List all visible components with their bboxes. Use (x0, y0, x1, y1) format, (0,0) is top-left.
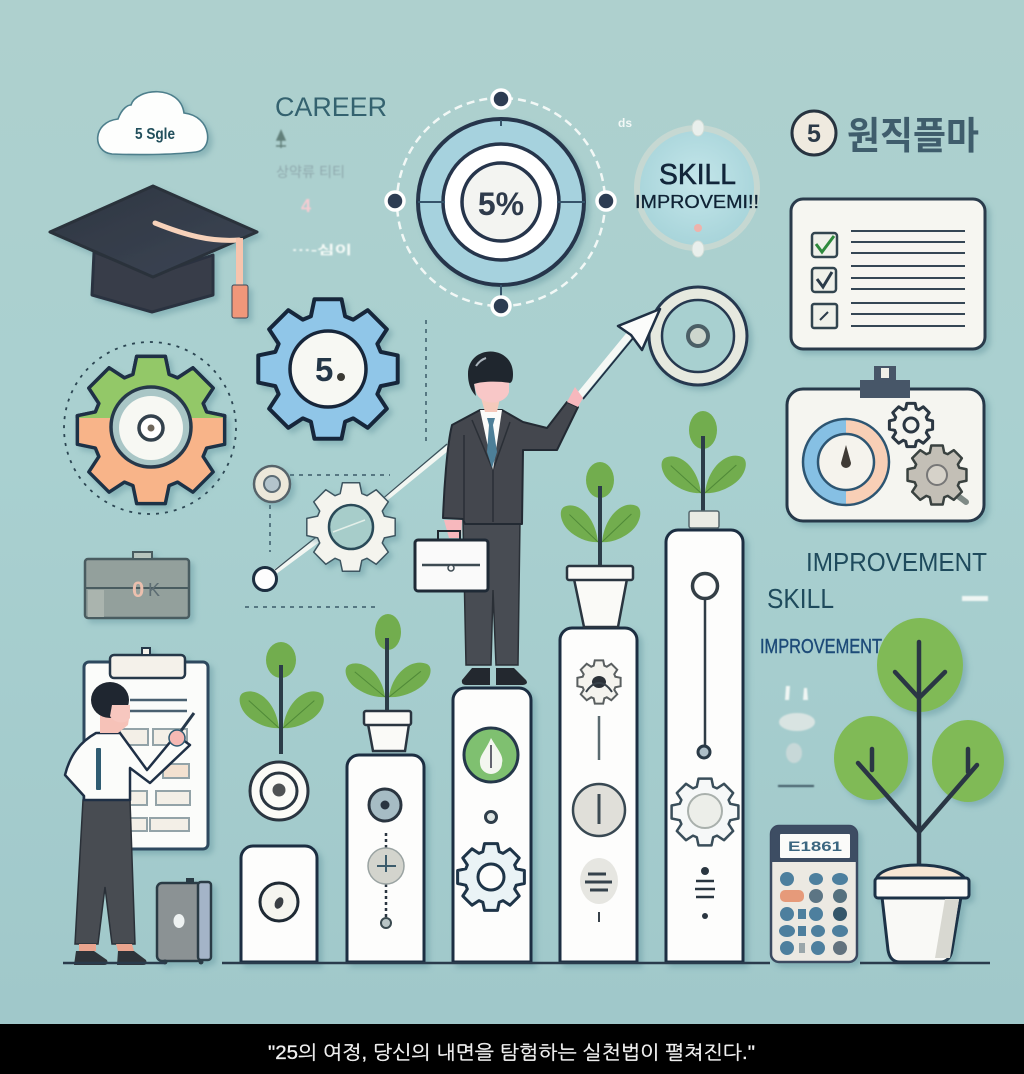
icon: gray briefcase (85, 552, 189, 618)
icon: calculator (771, 826, 857, 962)
badge: skill improvement: IMPROVEMI!! (635, 191, 759, 212)
icon: target ring at arrow tip (649, 287, 747, 385)
clipboard lines (130, 700, 187, 711)
faded career notes: ···-심이 (292, 243, 352, 257)
icon: graduation cap (50, 186, 257, 318)
icon: blue gear with 5 (258, 299, 398, 439)
faded marks right (778, 596, 988, 786)
icon: small ring node (254, 466, 290, 502)
panel clip (860, 366, 910, 398)
heading: numbered title: 원직플마 (847, 116, 979, 158)
badge: skill improvement (635, 120, 759, 257)
heading: career: CAREER (275, 92, 387, 122)
hands (444, 520, 462, 538)
heading: numbered title (792, 111, 979, 158)
outline gear (889, 403, 933, 447)
person shirt (65, 733, 190, 800)
dashed connector lines (245, 320, 426, 607)
bar 4 icons (573, 660, 625, 922)
white gear on arrow (307, 483, 395, 571)
faded career notes: 4 (301, 196, 311, 216)
plant 3 with pot (561, 462, 640, 627)
faded briefcase caption (94, 539, 212, 541)
faded career notes (276, 131, 352, 257)
caption bar (0, 1024, 1024, 1074)
calculator keys (779, 872, 848, 955)
icon: calculator: E1861 (788, 838, 842, 854)
baseline (63, 962, 990, 964)
figure: businessman (415, 309, 660, 685)
plant 2 with pot (346, 614, 431, 751)
shirt and tie (480, 410, 502, 470)
bar 5 icons (672, 574, 738, 919)
bar 3 (453, 688, 531, 962)
arrowhead (618, 309, 660, 350)
faded mark: ds (618, 116, 632, 130)
hair (468, 352, 513, 396)
icon: green orange gear (64, 342, 236, 514)
panel: clipboard (84, 648, 208, 849)
person pointer and hand (178, 713, 194, 735)
donut gauge (803, 419, 889, 505)
percent label: 5% (478, 186, 524, 222)
icon: gray briefcase: 0 (132, 577, 144, 602)
tree pot (875, 865, 969, 962)
bar 1 target icon (260, 883, 298, 921)
panel: checklist (791, 199, 985, 349)
label: improvement: IMPROVEMENT (806, 547, 987, 577)
bar 1 (241, 846, 317, 962)
figure: person at clipboard (65, 682, 194, 965)
icon: cloud with label (98, 92, 208, 155)
icon: suitcase (157, 878, 211, 964)
bar 2 (347, 755, 424, 962)
bar 3 icons (458, 728, 524, 910)
label: skill: SKILL (767, 583, 834, 614)
bar chart: five rising bars (241, 530, 743, 962)
bar 2 icons (368, 789, 404, 928)
ring nodes (386, 90, 615, 315)
label: improvement small: IMPROVEMENT (760, 635, 882, 658)
jacket (443, 402, 578, 524)
icon: gray briefcase: K (148, 580, 160, 600)
person head (100, 712, 130, 733)
arrow: rising growth line (254, 444, 449, 590)
head (481, 398, 500, 412)
caption text: "25의 여정, 당신의 내면을 탐험하는 실천법이 펼쳐진다." (268, 1043, 755, 1064)
checklist lines (851, 231, 965, 326)
person trousers (75, 800, 135, 944)
plant 1 with target (240, 642, 324, 820)
bar 4 (560, 628, 637, 962)
trousers (463, 520, 520, 665)
briefcase (438, 531, 460, 540)
shoes (462, 668, 527, 685)
icon: blue gear with 5: 5 (315, 351, 333, 388)
bar 5 (666, 530, 743, 962)
cloud label: 5 Sgle (135, 126, 175, 143)
faded career notes: 상약류 티티 (276, 164, 345, 180)
icon: tree in pot (834, 618, 1004, 962)
chart: 5% target ring (386, 90, 615, 315)
checkbox rows (812, 233, 837, 328)
heading: numbered title: 5 (807, 120, 821, 148)
person shoes (74, 951, 147, 965)
panel: gauge and gears (787, 366, 984, 521)
plant 4 with pot (662, 411, 746, 528)
arm to arrow shaft (580, 333, 631, 395)
magnifier gear (950, 490, 966, 502)
badge: skill improvement: SKILL (659, 159, 736, 191)
